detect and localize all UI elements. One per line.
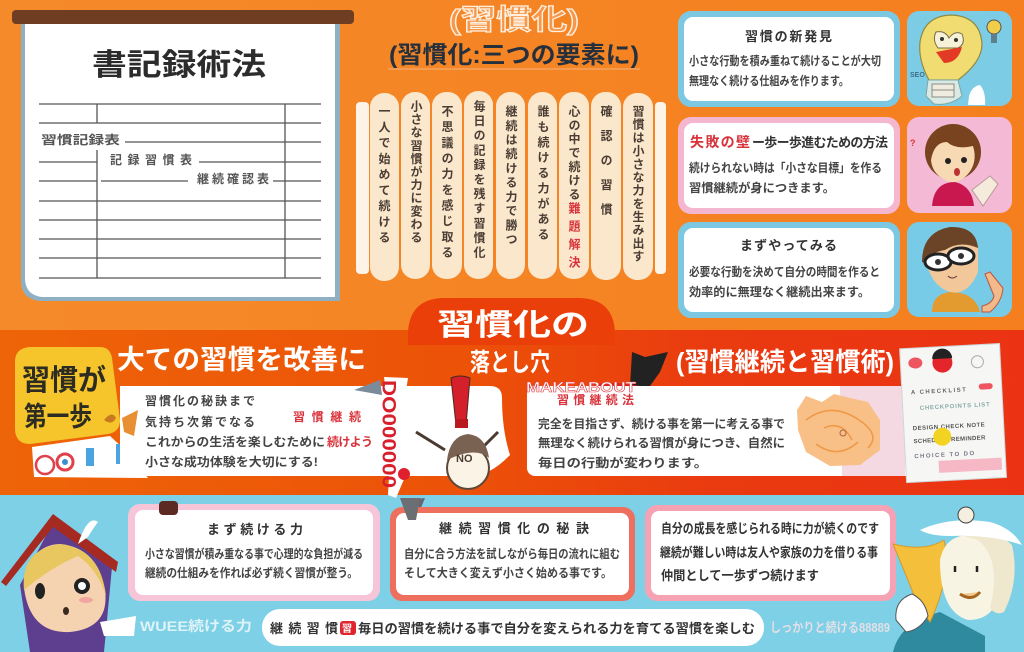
lower card 3 body: 仲間として一歩ずつ続けます: [661, 568, 819, 583]
icon: man with glasses: [907, 222, 1012, 317]
tip 2 body: 続けられない時は「小さな目標」を作る: [689, 160, 882, 175]
strip text columns: 毎日の記録を残す習慣化: [472, 99, 486, 259]
icon: document sheet: DESIGN CHECK NOTE: [913, 422, 985, 432]
tip 2 body: [689, 160, 882, 195]
panel: lower card 1: [128, 501, 380, 601]
poster heading: 書記録術法: [92, 49, 266, 82]
poster table: [39, 104, 321, 278]
bulb small label: SEO: [910, 72, 925, 79]
strip text columns: 不思議の力を感じ取る: [440, 105, 454, 258]
panel: tip card 1: [678, 11, 900, 107]
left card body: [145, 393, 373, 469]
icon: thinking girl: ?: [910, 138, 916, 148]
tab heading line 2: 落とし穴: [470, 349, 550, 377]
strip text columns: 習慣は小さな力を生み出す: [631, 105, 645, 262]
lower card 2 body: そして大きく変えず小さく始める事です。: [404, 565, 612, 580]
lower card 1 body: 継続の仕組みを作れば必ず続く習慣が整う。: [145, 565, 358, 580]
left card body: 習慣継続: [293, 409, 361, 424]
table row labels: [41, 132, 269, 186]
lower card 1 heading: まず続ける力: [207, 522, 303, 537]
strip text columns: 心の中で続ける: [567, 104, 581, 200]
panel: tip card 3: [678, 222, 900, 318]
tip 3 body: 効率的に無理なく継続出来ます。: [689, 284, 870, 299]
icon: document sheet: CHOICE TO DO: [914, 451, 975, 460]
strip text columns: [377, 99, 645, 269]
heading: right band: (習慣継続と習慣術): [676, 347, 894, 377]
tip 2 heading: 失敗の壁: [690, 134, 750, 150]
tip 3 body: [689, 264, 880, 299]
monkey face text: NO: [456, 453, 473, 465]
tip 1 body: 無理なく続ける仕組みを作ります。: [689, 73, 849, 88]
lower card 1 body: 小さな習慣が積み重なる事で心理的な負担が減る: [145, 546, 363, 561]
panel: tip card 2: [678, 117, 900, 214]
tip 1 heading: 習慣の新発見: [745, 29, 832, 44]
panel: footer message pill: [262, 609, 764, 646]
title: top outlined heading: (習慣化): [449, 4, 579, 35]
panel: central red tab heading: [408, 298, 615, 377]
icon: document sheet: A CHECKLIST: [911, 387, 966, 396]
panel: lower card 3: [645, 505, 896, 601]
icon: orange peony blob: [797, 394, 880, 466]
icon: thinking girl: [907, 117, 1012, 213]
lower card 1 body: [145, 546, 363, 580]
tip 3 heading: まずやってみる: [740, 238, 837, 253]
right card body: 毎日の行動が変わります。: [538, 455, 708, 470]
icon: smiling light bulb: [907, 11, 1012, 106]
icon: small coloured shapes: [36, 410, 138, 474]
table row labels: 継続確認表: [197, 171, 269, 186]
left card body: 習慣化の秘訣まで: [145, 393, 255, 408]
footer text: 継続習慣: [270, 621, 338, 636]
lower card 2 body: 自分に合う方法を試しながら毎日の流れに組む: [404, 546, 620, 561]
panel: left band text card: [32, 386, 510, 478]
table row labels: 習慣記録表: [41, 132, 120, 147]
tip 1 body: [689, 53, 881, 88]
callout: yellow label: 第一歩: [24, 402, 92, 432]
icon: red exclamation and monkey: [416, 376, 498, 489]
right card body: 完全を目指さず、続ける事を第一に考える事で: [538, 416, 785, 431]
icon: grey pin: [400, 498, 420, 520]
footer text: 習: [342, 623, 352, 635]
right card body: [538, 416, 785, 470]
tip 2 heading: ー歩ー歩進むための方法: [752, 135, 888, 150]
strip text columns: 小さな習慣が力に変わる: [409, 100, 423, 243]
strip text columns: 難題解決: [567, 201, 581, 269]
strip text columns: 一人で始めて続ける: [377, 105, 391, 243]
left card body: これからの生活を楽しむために: [145, 434, 325, 449]
panel: hanging poster with table: [12, 10, 354, 301]
strip text columns: 確認の習慣: [599, 104, 613, 216]
table row labels: 記録習慣表: [110, 152, 192, 167]
left card body: 気持ち次第でなる: [145, 414, 255, 429]
lower card 2 body: [404, 546, 620, 580]
strip text columns: 継続は続ける力で勝つ: [504, 104, 518, 245]
icon: small dark badge: [159, 501, 178, 515]
tab heading line 1: 習慣化の: [437, 309, 589, 342]
note: faded text left: WUEE続ける力: [140, 618, 252, 634]
left card body: 続けよう: [327, 434, 373, 449]
right card body: 無理なく続けられる習慣が身につき、自然に: [538, 435, 785, 450]
note: faded text right: しっかりと続ける88889: [770, 620, 890, 635]
icon: red vertical ribbon with plane: DO000000: [378, 380, 398, 488]
footer text: 毎日の習慣を続ける事で自分を変えられる力を育てる習慣を楽しむ: [358, 621, 755, 636]
heading: left band: 大ての習慣を改善に: [117, 345, 366, 375]
subtitle: (習慣化:三つの要素に): [389, 42, 639, 69]
panel: lower card 2: [390, 498, 635, 601]
icon: white-haired character with crown: [893, 507, 1022, 652]
background: orange upper section: [0, 0, 1024, 330]
icon: document sheet: SCHEDULE REMINDER: [913, 435, 986, 445]
lower card 2 heading: 継続習慣化の秘訣: [439, 521, 589, 536]
tip 3 body: 必要な行動を決めて自分の時間を作ると: [689, 264, 880, 279]
icon: document sheet: CHECKPOINTS LIST: [920, 402, 990, 412]
callout: yellow label: 習慣が: [22, 363, 106, 397]
right card red heading: 習慣継続法: [557, 392, 634, 407]
panel: right band text card: [527, 386, 922, 476]
tip 2 heading: [690, 134, 888, 150]
tip 1 body: 小さな行動を積み重ねて続けることが大切: [689, 53, 881, 68]
icon: blonde character in house: [1, 514, 136, 652]
background: red-orange middle band: [0, 330, 1024, 495]
icon: red vertical ribbon with plane: [354, 377, 425, 520]
icon: document sheet: [900, 344, 1006, 483]
decoration: black splat and scribble banner: [526, 352, 668, 396]
tip 2 body: 習慣継続が身につきます。: [689, 180, 835, 195]
left card body: 小さな成功体験を大切にする!: [145, 454, 318, 469]
lower card 3 body: 自分の成長を感じられる時に力が続くのです: [661, 521, 879, 536]
lower card 3 body: 継続が難しい時は友人や家族の力を借りる事: [660, 545, 878, 560]
strip text columns: 誰も続ける力がある: [536, 104, 550, 240]
callout: yellow label: [15, 347, 120, 444]
background: blue lower section: [0, 495, 1024, 652]
panel: vertical cream strips: [356, 91, 666, 281]
decoration: black splat and scribble banner: MAKEABOUT: [526, 379, 636, 396]
lower card 3 body: [660, 521, 879, 583]
